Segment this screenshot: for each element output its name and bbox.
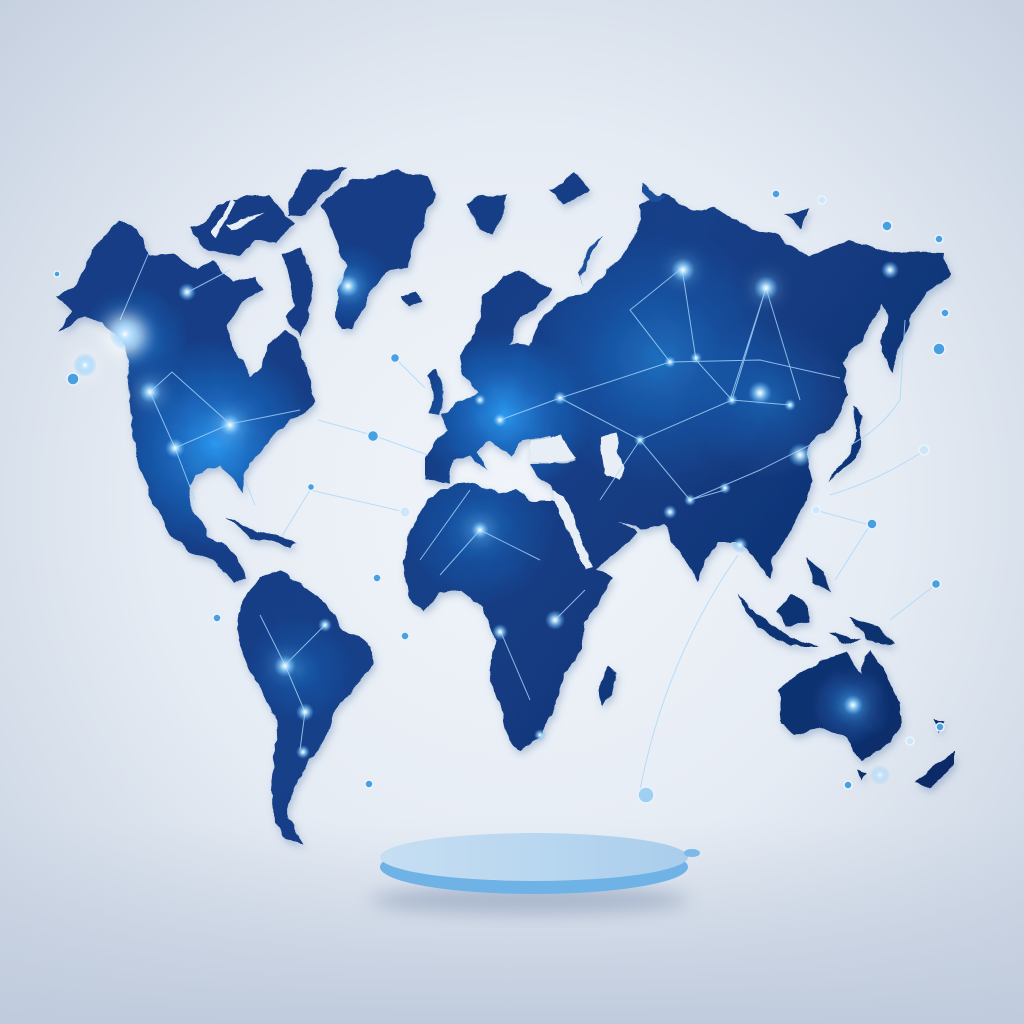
Greenland: [322, 168, 437, 330]
Arctic sliver: [642, 182, 666, 202]
city lights: [73, 258, 899, 785]
Small islands: [226, 172, 946, 780]
New Zealand: [916, 750, 954, 790]
inland seas and channels: [212, 200, 624, 570]
Australia: [778, 650, 902, 760]
platform rim: [380, 840, 688, 894]
network lines: [120, 250, 935, 790]
land shapes: [56, 168, 954, 844]
Africa: [403, 482, 612, 752]
regional blue glows: [80, 230, 890, 745]
platform: [370, 833, 700, 914]
Novaya Zemlya arc: [578, 236, 602, 288]
floating node markers: [54, 190, 949, 803]
Madagascar: [598, 666, 616, 708]
platform shadow: [370, 886, 690, 914]
Eurasia: [426, 194, 950, 582]
North America: [56, 220, 314, 584]
soft light blooms: [76, 262, 860, 712]
South America: [236, 572, 372, 844]
platform tab: [684, 849, 700, 857]
Baffin island: [282, 248, 314, 338]
Japan: [830, 406, 862, 482]
Southeast Asia islands: [738, 556, 894, 646]
Arctic island group: [188, 194, 296, 256]
United Kingdom: [428, 370, 444, 416]
platform top: [380, 833, 688, 881]
landmasses with coast texture: [56, 168, 954, 844]
Iceland: [466, 194, 506, 234]
Arctic island north: [286, 168, 348, 216]
